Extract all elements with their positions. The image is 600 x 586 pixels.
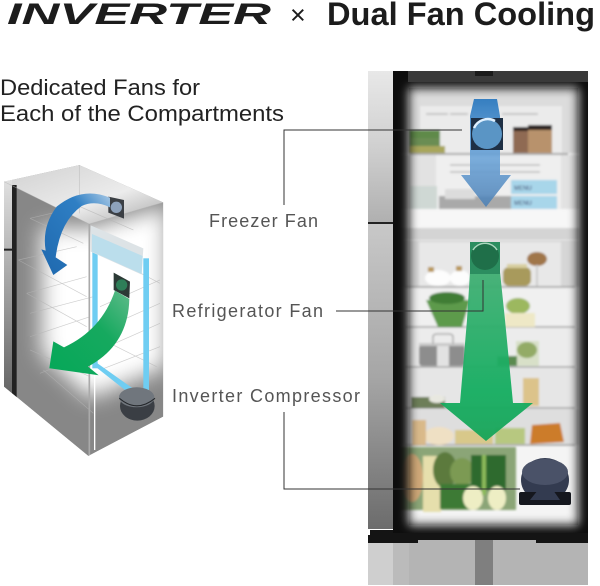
glass container — [410, 186, 437, 209]
menu boxes: MENU — [514, 201, 532, 207]
dessert glass — [527, 252, 547, 286]
vegetable container — [497, 341, 539, 366]
glass jar — [503, 264, 531, 286]
divider band — [400, 209, 580, 228]
subheading: Each of the Compartments — [0, 101, 284, 126]
leader line: refrigerator fan — [336, 280, 483, 311]
leader line: inverter compressor — [284, 412, 520, 489]
drink packs — [523, 378, 539, 406]
cabinet body — [4, 165, 167, 456]
feet — [368, 530, 588, 543]
blue airflow arrow — [41, 193, 110, 275]
subheading: Dedicated Fans for — [0, 75, 200, 100]
dark cabinet frame — [393, 71, 588, 533]
cheese and packs — [412, 420, 564, 445]
refrigerator photo — [368, 71, 588, 585]
side door panels — [368, 71, 394, 529]
multiplication sign: × — [290, 0, 306, 30]
green down arrow — [440, 272, 533, 441]
blue down arrow — [461, 99, 511, 207]
vegetable drawer — [400, 447, 516, 512]
icon: fridge compressor — [519, 458, 571, 505]
fridge interior — [393, 71, 588, 533]
icon: refrigerator fan — [114, 273, 130, 298]
freezer compartment — [400, 85, 580, 240]
menu boxes — [511, 180, 557, 209]
cutaway refrigerator diagram — [4, 165, 167, 456]
evaporator panel — [91, 225, 143, 275]
cooking pot — [419, 334, 465, 366]
bowls — [425, 266, 470, 286]
leader line: freezer fan — [284, 130, 462, 205]
label: inverter compressor: Inverter Compressor — [172, 386, 360, 406]
frozen green boxes — [409, 130, 445, 153]
refrigerator compartment — [400, 240, 580, 512]
icon: photo freezer fan — [471, 118, 503, 150]
compressor — [119, 387, 155, 421]
foil tray — [439, 189, 511, 209]
grapes dish — [505, 298, 535, 327]
floor reflection — [368, 540, 588, 585]
coolant pipes — [92, 248, 149, 393]
menu boxes: MENU — [514, 186, 532, 192]
icon: photo refrigerator fan — [470, 242, 500, 274]
salad bowl — [426, 292, 470, 327]
jars — [513, 125, 552, 153]
icon: freezer fan — [108, 197, 124, 219]
subheading — [0, 75, 284, 126]
label: freezer fan: Freezer Fan — [209, 211, 318, 231]
green airflow arrow — [49, 291, 129, 375]
leftover dish — [411, 395, 445, 408]
label: refrigerator fan: Refrigerator Fan — [172, 301, 323, 321]
